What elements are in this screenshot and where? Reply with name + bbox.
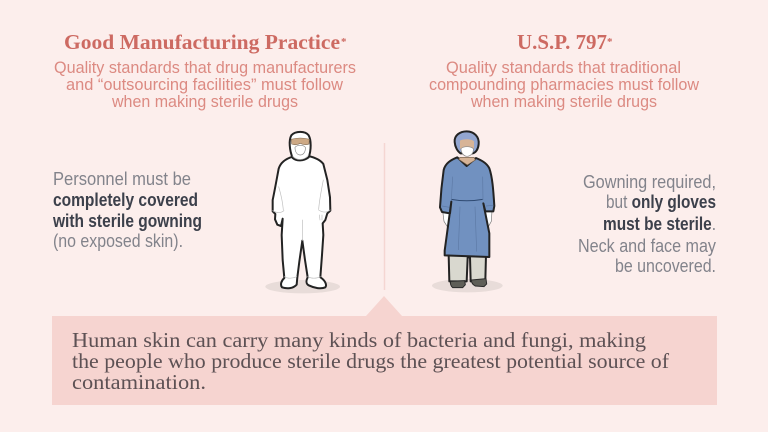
shadow [265, 280, 340, 293]
callout: contamination note [52, 296, 717, 405]
left body text: (no exposed skin). [53, 230, 183, 251]
right body text: must be sterile. [603, 213, 716, 234]
collar [293, 155, 308, 159]
right subheading: Quality standards that traditional [446, 59, 681, 77]
callout text: Human skin can carry many kinds of bacteria and fungi, making [72, 328, 647, 352]
left body text: completely covered [53, 189, 198, 210]
callout text: contamination. [72, 370, 206, 394]
divider [384, 143, 386, 290]
hand folds [319, 215, 322, 220]
mask [461, 147, 473, 156]
right body text [578, 171, 717, 276]
right body text: but only gloves [606, 191, 716, 212]
left body text [52, 168, 202, 251]
hood [290, 132, 311, 160]
right heading: U.S.P. 797: U.S.P. 797 [517, 30, 607, 54]
left subheading: when making sterile drugs [111, 93, 298, 111]
gloves [443, 211, 492, 227]
right body text: be uncovered. [615, 255, 716, 276]
right subheading: compounding pharmacies must follow [429, 76, 699, 94]
gown folds [442, 177, 493, 252]
suit details [273, 180, 330, 278]
trousers [449, 255, 486, 281]
left subheading: and “outsourcing facilities” must follow [66, 76, 343, 94]
right subheading [429, 59, 699, 111]
callout text: the people who produce sterile drugs the greatest potential source of [72, 349, 669, 373]
right subheading: when making sterile drugs [470, 93, 657, 111]
right body text: Neck and face may [578, 235, 717, 256]
figure: person in full sterile coverall [265, 132, 340, 293]
left body text: Personnel must be [53, 168, 191, 189]
left heading: Good Manufacturing Practice: * [341, 36, 347, 48]
left heading: Good Manufacturing Practice: Good Manufacturing Practice [64, 30, 340, 54]
coverall body [273, 156, 330, 288]
shoes [450, 279, 487, 288]
figure: person in blue gown and cap [432, 131, 503, 292]
left subheading [54, 59, 356, 111]
bouffant cap [455, 131, 479, 153]
gown [440, 157, 494, 257]
left body text: with sterile gowning [52, 210, 202, 231]
neck [459, 157, 475, 165]
shadow [432, 279, 503, 292]
mask [295, 145, 305, 155]
right heading: U.S.P. 797: * [607, 36, 613, 48]
left subheading: Quality standards that drug manufacturers [54, 59, 356, 77]
gown waist seam [451, 199, 483, 201]
right body text: Gowning required, [583, 171, 716, 192]
face [460, 139, 474, 149]
callout text [72, 328, 669, 394]
goggles [291, 138, 309, 145]
